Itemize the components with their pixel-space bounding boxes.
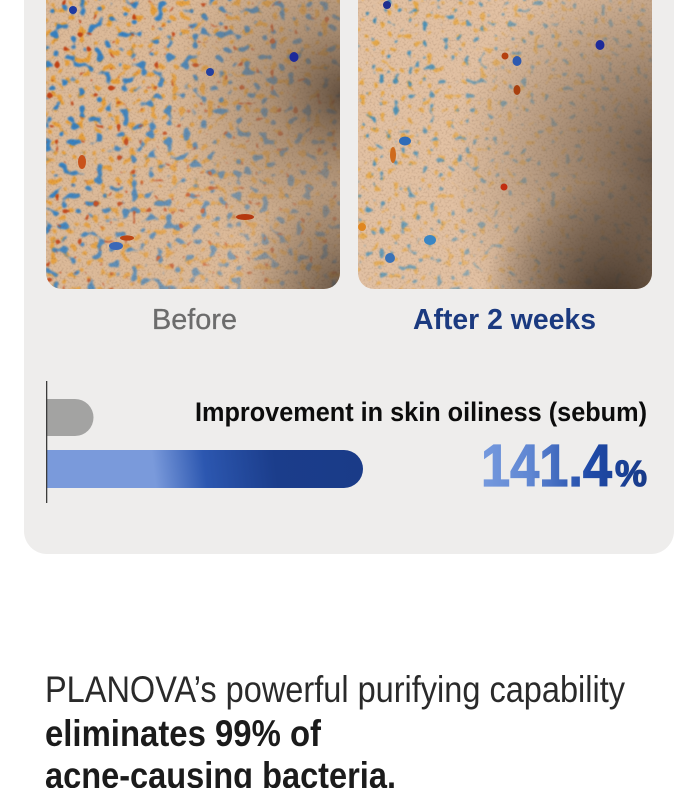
bar: before — [47, 399, 94, 436]
value: 141.4 percent: 141.4 — [481, 433, 612, 499]
chart heading: Improvement in skin oiliness (sebum) — [195, 397, 647, 427]
label: before: Before — [152, 304, 237, 336]
value: 141.4 percent: % — [615, 453, 647, 494]
panel: before and after comparison — [24, 0, 674, 554]
text block: purifying capability headline: eliminates 99% of — [45, 713, 322, 754]
text block: purifying capability headline: PLANOVA’s powerful purifying capability — [45, 669, 625, 710]
photo: skin analysis before — [46, 0, 340, 290]
photo: skin analysis after 2 weeks — [358, 0, 652, 290]
bar: after 2 weeks — [47, 450, 363, 488]
chart axis — [46, 381, 47, 503]
bar chart: sebum improvement — [46, 381, 363, 503]
label: after 2 weeks: After 2 weeks — [413, 304, 596, 336]
text block: purifying capability headline — [45, 669, 625, 788]
